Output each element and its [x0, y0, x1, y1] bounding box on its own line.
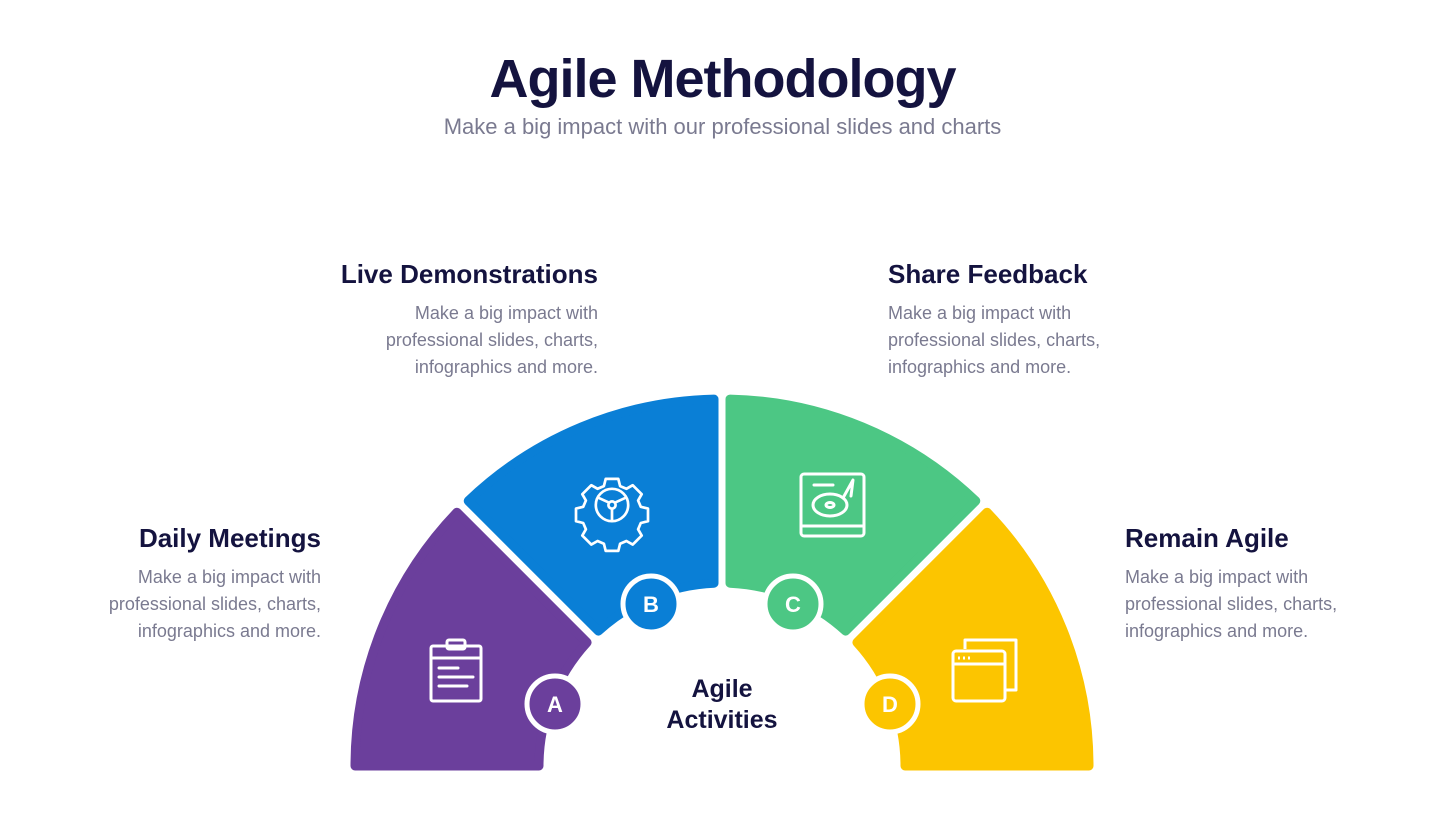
text block: Daily Meetings: Make a big impact with [138, 567, 321, 587]
text block: Share Feedback: infographics and more. [888, 357, 1071, 377]
segment C [730, 399, 976, 631]
badge A [527, 676, 583, 732]
badge B: B [643, 592, 659, 617]
text block: Live Demonstrations: Make a big impact with [415, 303, 598, 323]
text block: Share Feedback: professional slides, charts, [888, 330, 1100, 350]
icon: clipboard [431, 640, 481, 701]
text block: Remain Agile: Make a big impact with [1125, 567, 1308, 587]
text block: Share Feedback [888, 259, 1100, 377]
text block: Live Demonstrations: Live Demonstrations [341, 259, 598, 289]
text block: Remain Agile: professional slides, charts, [1125, 594, 1337, 614]
segment A [355, 512, 587, 766]
text block: Remain Agile: Remain Agile [1125, 523, 1289, 553]
text block: Remain Agile: infographics and more. [1125, 621, 1308, 641]
icon: windows [953, 640, 1016, 701]
center label: Agile [691, 675, 753, 703]
text block: Live Demonstrations: professional slides, charts, [386, 330, 598, 350]
icon: gear [576, 479, 648, 551]
badge C: C [785, 592, 801, 617]
subtitle: Make a big impact with our professional slides and charts [444, 114, 1001, 139]
badge D: D [882, 692, 898, 717]
text block: Daily Meetings: professional slides, charts, [109, 594, 321, 614]
text block: Remain Agile [1125, 523, 1337, 641]
text block: Daily Meetings: Daily Meetings [139, 523, 321, 553]
text block: Share Feedback: Make a big impact with [888, 303, 1071, 323]
badge A: A [547, 692, 563, 717]
segment B [468, 399, 714, 631]
badge B [623, 576, 679, 632]
text block: Daily Meetings [109, 523, 321, 641]
text block: Live Demonstrations [341, 259, 598, 377]
center label: Activities [666, 706, 778, 734]
title: Agile Methodology [490, 49, 955, 109]
segment D [857, 512, 1089, 766]
badge C [765, 576, 821, 632]
text block: Share Feedback: Share Feedback [888, 259, 1087, 289]
icon: hard drive [801, 474, 864, 536]
text block: Live Demonstrations: infographics and more. [415, 357, 598, 377]
center label [666, 675, 778, 734]
text block: Daily Meetings: infographics and more. [138, 621, 321, 641]
badge D [862, 676, 918, 732]
